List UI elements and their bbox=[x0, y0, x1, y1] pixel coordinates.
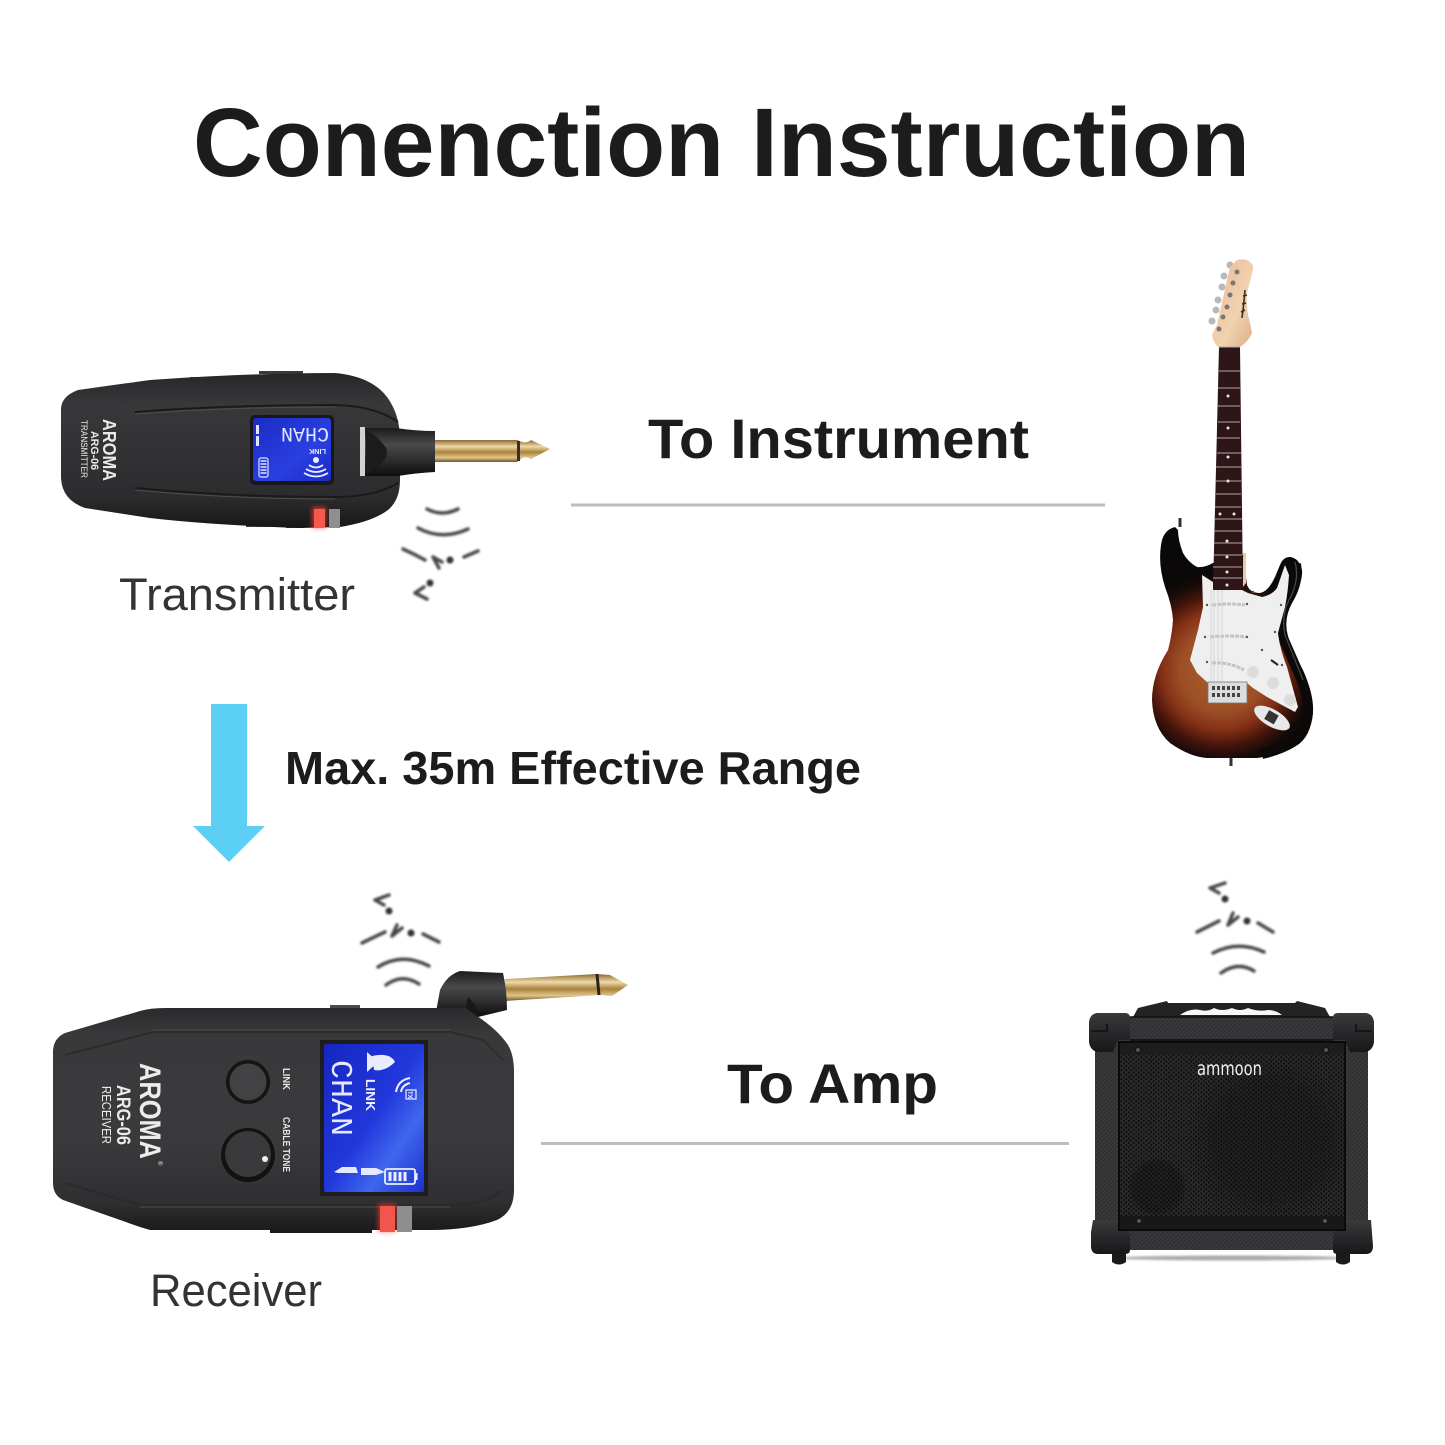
guitar pickguard bbox=[1190, 565, 1298, 712]
transmitter logo text: ARG-06 bbox=[88, 431, 100, 470]
receiver cable tone knob bbox=[221, 1117, 291, 1182]
receiver LCD screen: TX bbox=[406, 1091, 412, 1099]
receiver body bbox=[53, 1008, 514, 1230]
receiver LCD screen bbox=[320, 1040, 428, 1196]
label: To Amp: To Amp bbox=[727, 1052, 938, 1115]
transmitter logo text bbox=[79, 419, 119, 481]
transmitter body bbox=[61, 373, 400, 528]
guitar tuner pegs bbox=[1208, 262, 1234, 324]
receiver plug bbox=[436, 971, 628, 1017]
device: transmitter bbox=[61, 371, 550, 528]
guitar strap pins bbox=[1180, 518, 1231, 766]
receiver link button bbox=[226, 1060, 291, 1104]
signal waves: amp bbox=[1197, 883, 1273, 973]
icon: electric guitar bbox=[1152, 259, 1313, 766]
receiver bottom tab bbox=[270, 1228, 372, 1233]
label: Max. 35m Effective Range: Max. 35m Effective Range bbox=[285, 742, 861, 794]
connector line: instrument bbox=[571, 504, 1105, 506]
label: Transmitter: Transmitter bbox=[119, 569, 355, 620]
title: Conenction Instruction bbox=[193, 88, 1250, 197]
transmitter LEDs bbox=[312, 507, 340, 528]
guitar neck bbox=[1213, 347, 1243, 590]
receiver LCD screen: CHAN bbox=[322, 1060, 357, 1136]
transmitter top tabs bbox=[190, 371, 304, 528]
receiver top tab bbox=[330, 1005, 360, 1008]
icon: guitar amplifier bbox=[1089, 1001, 1374, 1264]
amp brand: ammoon bbox=[1197, 1058, 1262, 1080]
amp corners bbox=[1089, 1013, 1374, 1254]
label: To Instrument: To Instrument bbox=[648, 407, 1029, 470]
guitar bridge bbox=[1208, 682, 1247, 703]
amp grille bbox=[1119, 1042, 1345, 1230]
transmitter plug bbox=[360, 427, 550, 476]
receiver plug collar bbox=[466, 997, 478, 1017]
receiver logo text bbox=[99, 1063, 166, 1166]
amp feet bbox=[1112, 1254, 1350, 1264]
receiver link button: LINK bbox=[280, 1068, 291, 1091]
guitar body bbox=[1152, 527, 1313, 758]
transmitter LCD screen: LINK bbox=[309, 447, 326, 454]
guitar jack plate bbox=[1250, 701, 1294, 735]
amp shadow bbox=[1117, 1256, 1347, 1260]
transmitter logo text: AROMA bbox=[99, 419, 119, 481]
receiver logo text: ARG-06 bbox=[112, 1085, 133, 1145]
receiver logo text: RECEIVER bbox=[99, 1086, 114, 1144]
signal waves: transmitter bbox=[403, 509, 478, 599]
amp speakers bbox=[1200, 1070, 1340, 1210]
transmitter LCD screen bbox=[250, 415, 334, 485]
amp handle bbox=[1133, 1001, 1330, 1017]
label: Receiver: Receiver bbox=[150, 1265, 322, 1316]
guitar headstock bbox=[1212, 259, 1253, 347]
signal waves: receiver bbox=[362, 895, 439, 985]
transmitter LCD screen: CHAN bbox=[281, 421, 329, 444]
receiver cable tone knob: CABLE TONE bbox=[280, 1117, 291, 1172]
receiver logo text: AROMA bbox=[133, 1063, 166, 1159]
transmitter logo text: TRANSMITTER bbox=[79, 420, 89, 478]
amp screws bbox=[1136, 1048, 1328, 1224]
receiver LEDs bbox=[378, 1204, 412, 1232]
arrow: range bbox=[193, 704, 265, 862]
receiver LCD screen: LINK bbox=[363, 1079, 378, 1112]
connector line: amp bbox=[541, 1142, 1069, 1145]
device: receiver bbox=[53, 971, 628, 1233]
receiver logo text: ® bbox=[156, 1161, 163, 1166]
amp cabinet bbox=[1095, 1017, 1368, 1250]
